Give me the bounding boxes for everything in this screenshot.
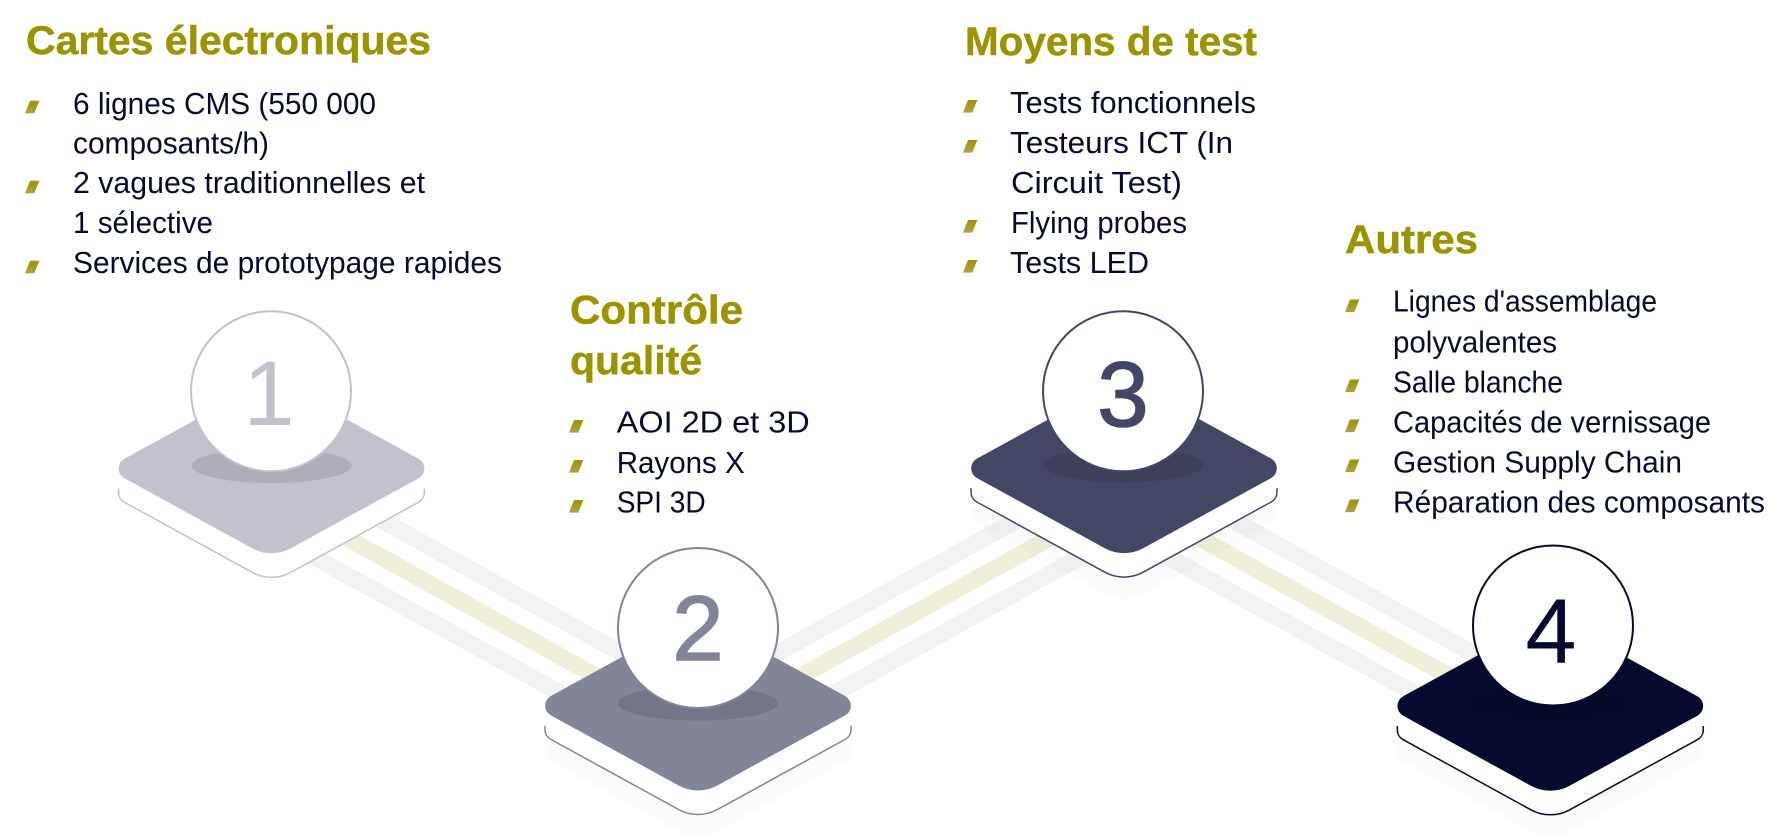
list: Autres items: Réparation des composants: [1393, 485, 1765, 520]
step 2 platform: 2: [672, 578, 724, 680]
list: Cartes électroniques items: 1 sélective: [73, 205, 213, 240]
list: Autres items: Gestion Supply Chain: [1393, 445, 1682, 480]
heading: Contrôle qualité: qualité: [570, 339, 702, 383]
step 3 platform: [971, 311, 1277, 599]
heading: Contrôle qualité: [570, 288, 743, 383]
panel: Autres: [1345, 218, 1765, 520]
step 2 platform: [545, 548, 851, 836]
panel: Contrôle qualité: [569, 288, 810, 520]
list: Cartes électroniques items: Services de prototypage rapides: [73, 245, 502, 280]
list: Moyens de test items: Tests LED: [1010, 245, 1149, 280]
list: Autres items: polyvalentes: [1393, 325, 1557, 360]
heading: Cartes électroniques: Cartes électroniques: [26, 19, 431, 63]
step 4 platform: [1397, 546, 1703, 837]
step 1 platform: [119, 311, 424, 577]
list: Autres items: Salle blanche: [1393, 365, 1563, 400]
connector: step 2 to step 3: [745, 477, 1095, 743]
step 4 platform: 4: [1525, 581, 1577, 683]
heading: Moyens de test: Moyens de test: [965, 20, 1257, 64]
heading: Autres: Autres: [1345, 218, 1478, 262]
heading: Contrôle qualité: Contrôle: [570, 288, 743, 332]
list: Moyens de test items: Testeurs ICT (In: [1010, 125, 1233, 160]
list: Autres items: Lignes d'assemblage: [1393, 284, 1657, 319]
list: Autres items: [1345, 284, 1765, 520]
list: Contrôle qualité items: Rayons X: [617, 445, 745, 480]
list: Cartes électroniques items: 6 lignes CMS (550 000: [73, 86, 376, 121]
list: Moyens de test items: Circuit Test): [1011, 165, 1182, 200]
list: Autres items: Capacités de vernissage: [1393, 405, 1711, 440]
connector: step 3 to step 4: [1150, 474, 1510, 746]
list: Contrôle qualité items: SPI 3D: [617, 485, 706, 520]
list: Contrôle qualité items: AOI 2D et 3D: [617, 405, 810, 440]
list: Contrôle qualité items: [569, 405, 810, 520]
connector: step 1 to step 2: [300, 475, 650, 743]
list: Cartes électroniques items: 2 vagues traditionnelles et: [73, 165, 425, 200]
panel: Cartes électroniques: [25, 19, 502, 280]
step 1 platform: 1: [243, 343, 295, 445]
list: Moyens de test items: [963, 85, 1256, 280]
list: Moyens de test items: Flying probes: [1011, 205, 1187, 240]
list: Cartes électroniques items: composants/h): [73, 126, 269, 160]
list: Moyens de test items: Tests fonctionnels: [1010, 85, 1256, 120]
panel: Moyens de test: [963, 20, 1257, 280]
list: Cartes électroniques items: [25, 86, 502, 280]
step 3 platform: 3: [1097, 344, 1149, 446]
